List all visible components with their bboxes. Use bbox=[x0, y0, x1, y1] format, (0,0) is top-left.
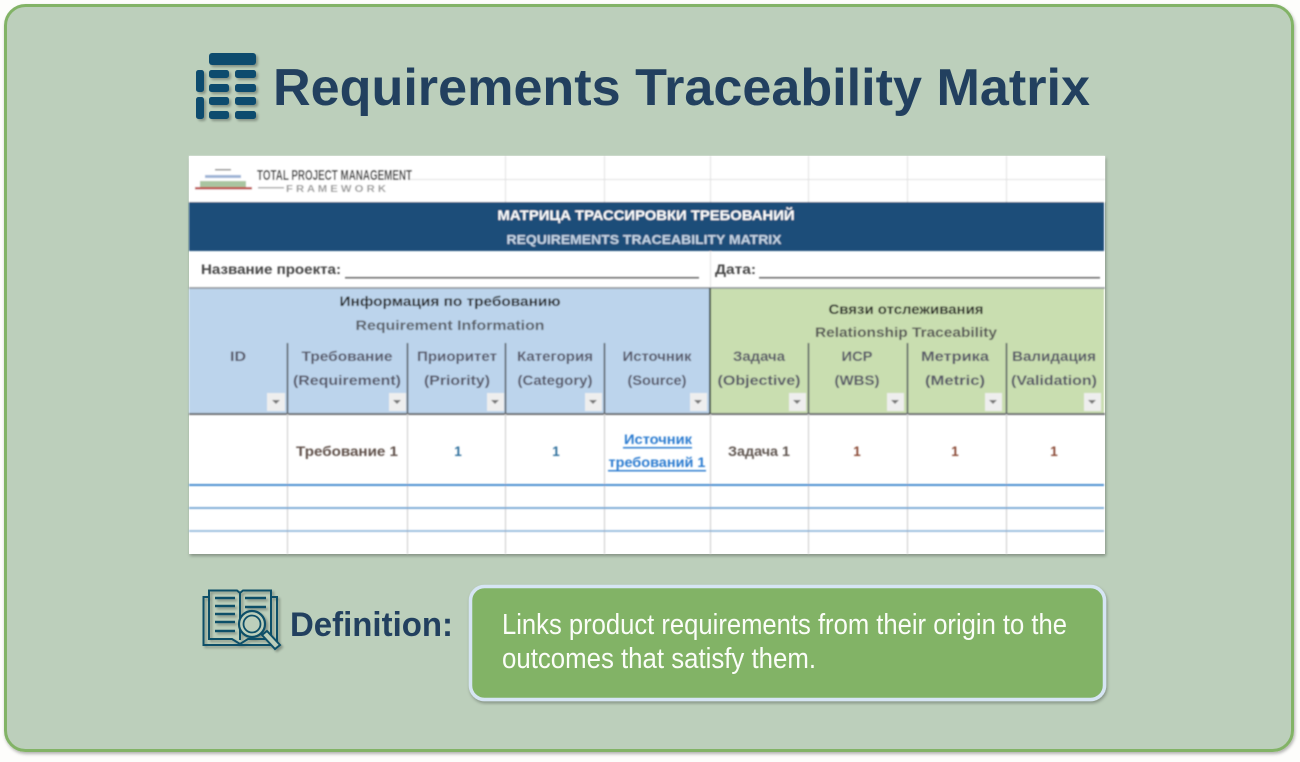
title band bbox=[189, 202, 1104, 251]
column headers: Источник bbox=[622, 348, 693, 364]
column headers: (Category) bbox=[518, 372, 592, 388]
column headers: (Source) bbox=[628, 372, 686, 388]
filter buttons bbox=[267, 393, 1101, 411]
column headers: Категория bbox=[517, 348, 593, 364]
column headers: (Requirement) bbox=[293, 372, 401, 388]
callout: definition text box: outcomes that satisfy them. bbox=[502, 643, 816, 675]
panel: spreadsheet screenshot bbox=[189, 156, 1105, 554]
column headers bbox=[230, 348, 1097, 388]
column headers: (WBS) bbox=[834, 372, 880, 388]
data row: Источник bbox=[624, 432, 692, 447]
data row: 1 bbox=[951, 444, 959, 459]
project row: Название проекта: bbox=[201, 261, 341, 277]
callout: definition text box: Links product requirements from their origin to the bbox=[502, 609, 1067, 641]
logo row: F R A M E W O R K bbox=[286, 184, 387, 195]
data row: 1 bbox=[552, 444, 560, 459]
logo row bbox=[189, 156, 1105, 202]
data row: требований 1 bbox=[608, 455, 706, 470]
data row: Задача 1 bbox=[728, 444, 791, 459]
icon: open book with magnifier bbox=[204, 590, 280, 649]
group header: requirement information bbox=[189, 288, 710, 414]
project row bbox=[201, 251, 1100, 288]
column headers: Метрика bbox=[921, 348, 989, 364]
column headers: (Objective) bbox=[718, 372, 800, 388]
column headers: Валидация bbox=[1012, 348, 1096, 364]
icon: table list bbox=[196, 53, 256, 119]
group header: relationship traceability: Relationship Traceability bbox=[815, 324, 997, 340]
project row: Дата: bbox=[715, 261, 756, 277]
column headers: ИСР bbox=[842, 348, 872, 364]
data row bbox=[296, 432, 1058, 472]
title band: REQUIREMENTS TRACEABILITY MATRIX bbox=[506, 232, 782, 247]
column headers: (Priority) bbox=[424, 372, 490, 388]
logo row: TOTAL PROJECT MANAGEMENT bbox=[257, 167, 412, 184]
title band: МАТРИЦА ТРАССИРОВКИ ТРЕБОВАНИЙ bbox=[498, 206, 794, 223]
column headers: (Metric) bbox=[925, 372, 985, 388]
data row: 1 bbox=[1050, 444, 1058, 459]
column headers: Приоритет bbox=[417, 348, 497, 364]
data row: Требование 1 bbox=[296, 444, 399, 459]
column headers: (Validation) bbox=[1011, 372, 1097, 388]
data row: 1 bbox=[454, 444, 462, 459]
column headers: ID bbox=[230, 348, 246, 364]
column headers: Задача bbox=[733, 348, 785, 364]
group header: requirement information: Информация по требованию bbox=[340, 293, 561, 309]
grid lines bbox=[189, 288, 1105, 554]
data row: 1 bbox=[853, 444, 861, 459]
heading: definition: Definition: bbox=[290, 606, 453, 644]
column headers: Требование bbox=[302, 348, 393, 364]
group header: relationship traceability bbox=[710, 288, 1104, 414]
group header: relationship traceability: Связи отслеживания bbox=[828, 301, 984, 317]
group header: requirement information: Requirement Information bbox=[356, 317, 544, 333]
callout: definition text box bbox=[470, 586, 1104, 700]
title: Requirements Traceability Matrix bbox=[273, 59, 1090, 117]
